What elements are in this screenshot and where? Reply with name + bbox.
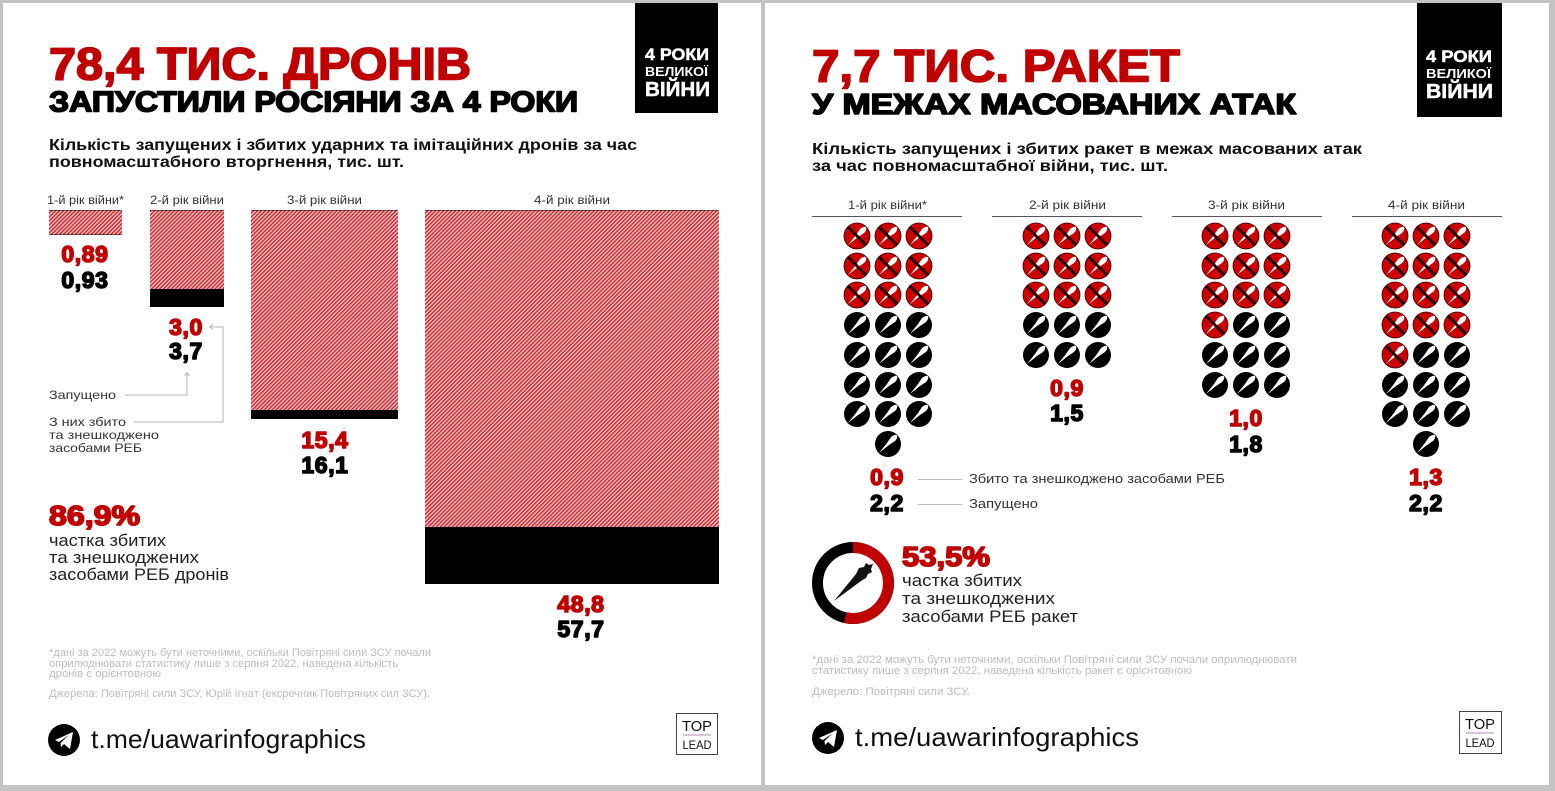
icon: telegram (48, 724, 80, 756)
callout: 53.5%: засобами РЕБ ракет (902, 607, 1078, 626)
pictogram: year 4: 4-й рік війни (1388, 198, 1465, 212)
callout: 86.9%: 86,9% (49, 500, 140, 531)
callout: 53.5%: та знешкоджених (902, 589, 1056, 608)
legend: shot down: засобами РЕБ (49, 441, 142, 455)
pictogram: year 3: 1,0 (1229, 405, 1263, 431)
icon: telegram (812, 722, 844, 754)
legend: shot down: З них збито (49, 415, 126, 429)
panel: drones (3, 3, 761, 785)
pictogram: year 4: 1,3 (1409, 464, 1443, 490)
pictogram: year 2: 1,5 (1050, 400, 1084, 426)
pictogram: year 1: 0,9 (870, 464, 904, 490)
panel: missiles (765, 3, 1549, 785)
subtitle: Кількість запущених і збитих ракет в межах масованих атак (812, 141, 1363, 158)
title: ЗАПУСТИЛИ РОСІЯНИ ЗА 4 РОКИ (49, 86, 578, 118)
pictogram: year 3: 3-й рік війни (1208, 198, 1285, 212)
bar: year 3 (251, 193, 398, 478)
bar: year 4: 57,7 (557, 616, 605, 642)
logo: Top Lead (1460, 712, 1502, 754)
bar: year 3: 15,4 (301, 427, 349, 453)
pictogram: year 4 (1352, 198, 1502, 516)
bar: year 1: 0,89 (61, 241, 109, 267)
logo: Top Lead (676, 714, 718, 754)
badge: 4 years of war: 4 РОКИ (645, 45, 709, 64)
bar: year 1: 1-й рік війни* (47, 193, 124, 207)
badge: 4 years of war: ВЕЛИКОЇ (645, 64, 708, 79)
bar: year 4: 48,8 (557, 591, 605, 617)
bar: year 2: 3,0 (169, 314, 203, 340)
pictogram: year 1 (812, 198, 962, 516)
callout: 86.9%: частка збитих (49, 531, 167, 550)
title: 7,7 ТИС. РАКЕТ (812, 40, 1180, 92)
legend: shot down: та знешкоджено (49, 428, 159, 442)
logo: Top Lead: TOP (682, 719, 712, 735)
telegram link: t.me/uawarinfographics (855, 722, 1139, 752)
callout: 53.5%: 53,5% (902, 541, 990, 572)
logo: Top Lead: LEAD (1466, 738, 1494, 750)
pictogram: year 3: 1,8 (1229, 431, 1263, 457)
subtitle: за час повномасштабної війни, тис. шт. (812, 158, 1168, 175)
bar: year 1: 0,93 (61, 267, 109, 293)
bar: year 1 (47, 193, 124, 293)
badge: 4 years of war: ВЕЛИКОЇ (1426, 66, 1491, 81)
footnote and sources: оприлюднювати статистику лише з серпня 2022, наведена кількість (49, 658, 398, 670)
footnote and sources: *дані за 2022 можуть бути неточними, оскільки Повітряні сили ЗСУ почали оприлюднювати (812, 654, 1297, 666)
bar: year 2: 3,7 (169, 338, 203, 364)
pictogram: year 3 (1172, 198, 1322, 457)
bar: year 3: 3-й рік війни (287, 193, 362, 207)
legend: shot down (49, 324, 223, 455)
pictogram: year 2: 2-й рік війни (1029, 198, 1106, 212)
title (49, 38, 578, 118)
legend: Запущено (969, 496, 1038, 511)
legend (918, 471, 1225, 511)
badge: 4 years of war: ВІЙНИ (645, 77, 710, 101)
subtitle: Кількість запущених і збитих ударних та імітаційних дронів за час (49, 137, 637, 154)
badge: 4 years of war (635, 3, 718, 113)
bar: year 4: 4-й рік війни (534, 193, 610, 207)
bar chart: drones by year (47, 193, 719, 642)
telegram link: t.me/uawarinfographics (91, 724, 366, 754)
pictogram: year 1: 1-й рік війни* (848, 198, 927, 212)
bar: year 2: 2-й рік війни (150, 193, 224, 207)
bar: year 2 (150, 193, 224, 364)
footnote and sources: Джерело: Повітряні сили ЗСУ. (812, 686, 970, 698)
title: У МЕЖАХ МАСОВАНИХ АТАК (812, 89, 1297, 121)
pictogram: year 2: 0,9 (1050, 375, 1084, 401)
legend: Збито та знешкоджено засобами РЕБ (969, 471, 1225, 486)
subtitle (49, 137, 637, 171)
bar: year 4 (425, 193, 719, 642)
bar: year 3: 16,1 (301, 452, 349, 478)
callout: 53.5%: частка збитих (902, 571, 1023, 590)
legend: launched (49, 372, 190, 402)
callout: 86.9%: засобами РЕБ дронів (49, 565, 229, 584)
badge: 4 years of war: 4 РОКИ (1426, 47, 1492, 66)
callout: 53.5% (902, 541, 1078, 626)
subtitle (812, 141, 1363, 175)
badge: 4 years of war: ВІЙНИ (1426, 79, 1493, 103)
logo: Top Lead: LEAD (682, 740, 712, 752)
footnote and sources (812, 654, 1297, 698)
title: 78,4 ТИС. ДРОНІВ (49, 38, 471, 90)
title (812, 40, 1297, 121)
footnote and sources: статистику лише з серпня 2022, наведена кількість ракет є орієнтовною (812, 665, 1192, 677)
donut chart: 53.5% (818, 548, 888, 618)
footnote and sources: *дані за 2022 можуть бути неточними, оскільки Повітряні сили ЗСУ почали (49, 647, 431, 659)
pictogram: year 4: 2,2 (1409, 490, 1443, 516)
callout: 86.9% (49, 500, 229, 584)
pictogram: year 2 (992, 198, 1142, 426)
icon: missile (834, 563, 873, 601)
badge: 4 years of war (1417, 3, 1502, 117)
pictogram: year 1: 2,2 (870, 490, 904, 516)
subtitle: повномасштабного вторгнення, тис. шт. (49, 154, 404, 171)
footnote and sources: Джерела: Повітряні сили ЗСУ, Юрій Ігнат (ексречник Повітряних сил ЗСУ). (49, 688, 430, 700)
legend: launched: Запущено (49, 388, 116, 402)
footnote and sources (49, 647, 431, 700)
footnote and sources: дронів є орієнтовною (49, 668, 161, 680)
logo: Top Lead: TOP (1465, 717, 1495, 733)
callout: 86.9%: та знешкоджених (49, 548, 200, 567)
